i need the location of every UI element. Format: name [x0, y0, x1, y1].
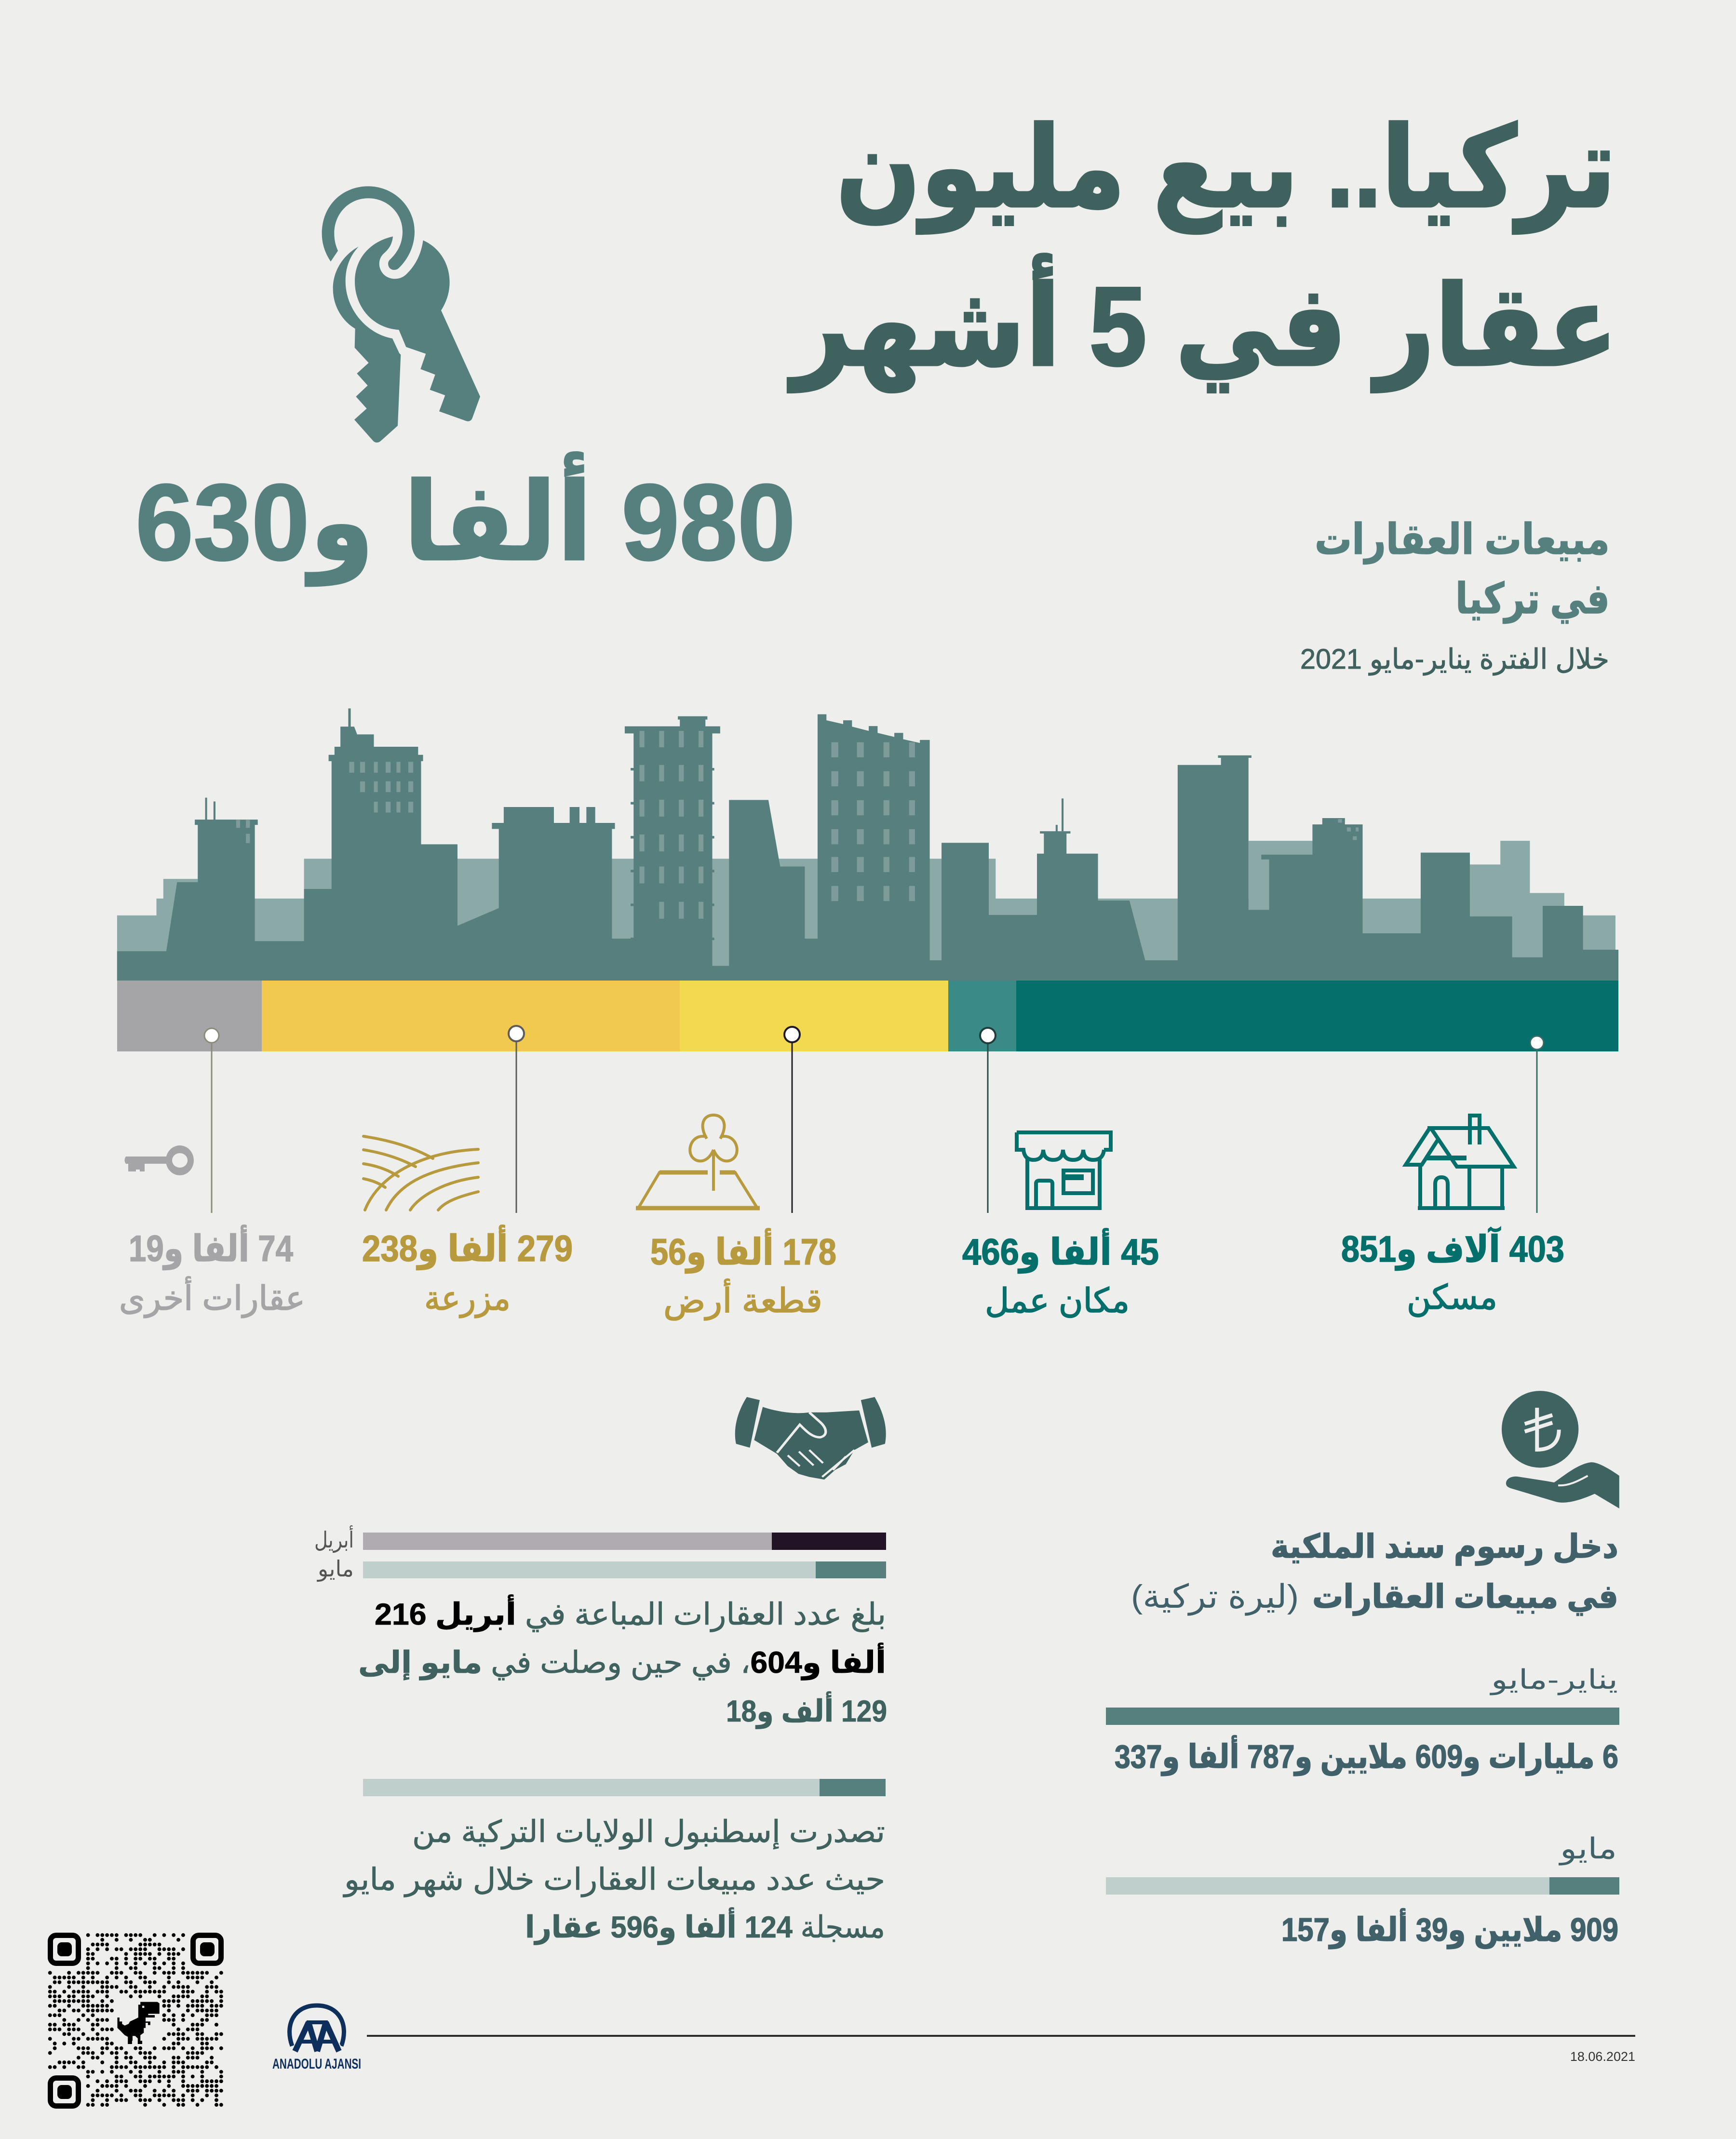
- text: April vs May sales: ألفا و604، في حين وصلت في مايو إلى: [358, 1642, 886, 1681]
- revenue: May: مايو: [1558, 1832, 1617, 1866]
- logo: Anadolu Ajansi: [272, 2005, 361, 2072]
- label: farm: مزرعة: [424, 1279, 511, 1318]
- heading: title deed revenue: [1131, 1528, 1618, 1616]
- icon: house: [1406, 1116, 1514, 1208]
- icon: handshake: [735, 1397, 886, 1480]
- text: April vs May sales: 129 ألف و18: [726, 1691, 887, 1729]
- revenue: January-May: [1106, 1664, 1619, 1776]
- label: workplace: 45 ألفا و466: [962, 1228, 1159, 1274]
- label: farm: 279 ألفا و238: [362, 1224, 573, 1270]
- text: Istanbul leads: مسجلة 124 ألفا و596 عقارا: [525, 1907, 885, 1945]
- label: other properties: [119, 1224, 305, 1318]
- title: عقار في 5 أشهر: [788, 254, 1618, 392]
- icon: coin in hand: [1502, 1391, 1619, 1508]
- text: April vs May sales: [358, 1594, 887, 1729]
- revenue: May: 909 ملايين و39 ألفا و157: [1281, 1908, 1618, 1949]
- heading: title deed revenue: في مبيعات العقارات: [1312, 1578, 1618, 1616]
- heading: title deed revenue: دخل رسوم سند الملكية: [1271, 1528, 1618, 1566]
- label: land plot: [650, 1228, 836, 1320]
- text: April vs May sales: بلغ عدد العقارات المباعة في أبريل 216: [375, 1594, 886, 1632]
- label: workplace: [962, 1228, 1159, 1319]
- label: land plot: قطعة أرض: [663, 1278, 822, 1320]
- period note: خلال الفترة يناير-مايو 2021: [1300, 644, 1609, 676]
- bar: May: [363, 1561, 886, 1578]
- icon: shop: [1017, 1132, 1111, 1208]
- bar: Istanbul share: [363, 1779, 886, 1796]
- skyline illustration: [117, 709, 1618, 981]
- leader lines and markers: [204, 1026, 1544, 1213]
- total sales figure: 980 ألفا و630: [135, 452, 795, 586]
- QR code: [50, 1935, 222, 2106]
- subtitle: [1300, 515, 1610, 676]
- revenue: May: [1106, 1832, 1619, 1949]
- icon: keys: [322, 186, 480, 443]
- stacked bar: property types: [117, 981, 1618, 1051]
- label: other properties: عقارات أخرى: [119, 1276, 305, 1318]
- bar labels: [314, 1525, 354, 1582]
- icon: dino: [117, 2002, 160, 2044]
- bar labels: أبريل: [314, 1525, 354, 1553]
- label: farm: [362, 1224, 573, 1318]
- subtitle: في تركيا: [1455, 575, 1610, 624]
- label: other properties: 74 ألفا و19: [129, 1224, 293, 1270]
- heading: title deed revenue: (ليرة تركية): [1131, 1578, 1299, 1616]
- label: housing: [1341, 1226, 1564, 1317]
- icon: farm fields: [363, 1136, 478, 1210]
- revenue: January-May: يناير-مايو: [1489, 1664, 1618, 1695]
- date: 18.06.2021: [1570, 2049, 1635, 2064]
- icon: key: [124, 1145, 194, 1175]
- title: [788, 106, 1618, 392]
- logo: Anadolu Ajansi: ANADOLU AJANSI: [272, 2056, 361, 2072]
- bar labels: مايو: [317, 1556, 354, 1582]
- title: تركيا.. بيع مليون: [836, 106, 1616, 234]
- subtitle: مبيعات العقارات: [1315, 515, 1610, 564]
- label: housing: 403 آلاف و851: [1341, 1226, 1564, 1271]
- text: Istanbul leads: [343, 1815, 885, 1945]
- chart: monthly comparison bars: [314, 1525, 886, 1582]
- icon: land plot with tree: [636, 1115, 760, 1208]
- label: housing: مسكن: [1407, 1278, 1497, 1317]
- revenue: January-May: 6 مليارات و609 ملايين و787 ألفا و337: [1115, 1735, 1618, 1776]
- text: Istanbul leads: تصدرت إسطنبول الولايات التركية من: [412, 1815, 885, 1850]
- bar: April: [363, 1533, 886, 1550]
- text: Istanbul leads: حيث عدد مبيعات العقارات خلال شهر مايو: [343, 1863, 885, 1897]
- label: workplace: مكان عمل: [985, 1282, 1130, 1319]
- label: land plot: 178 ألفا و56: [650, 1228, 836, 1274]
